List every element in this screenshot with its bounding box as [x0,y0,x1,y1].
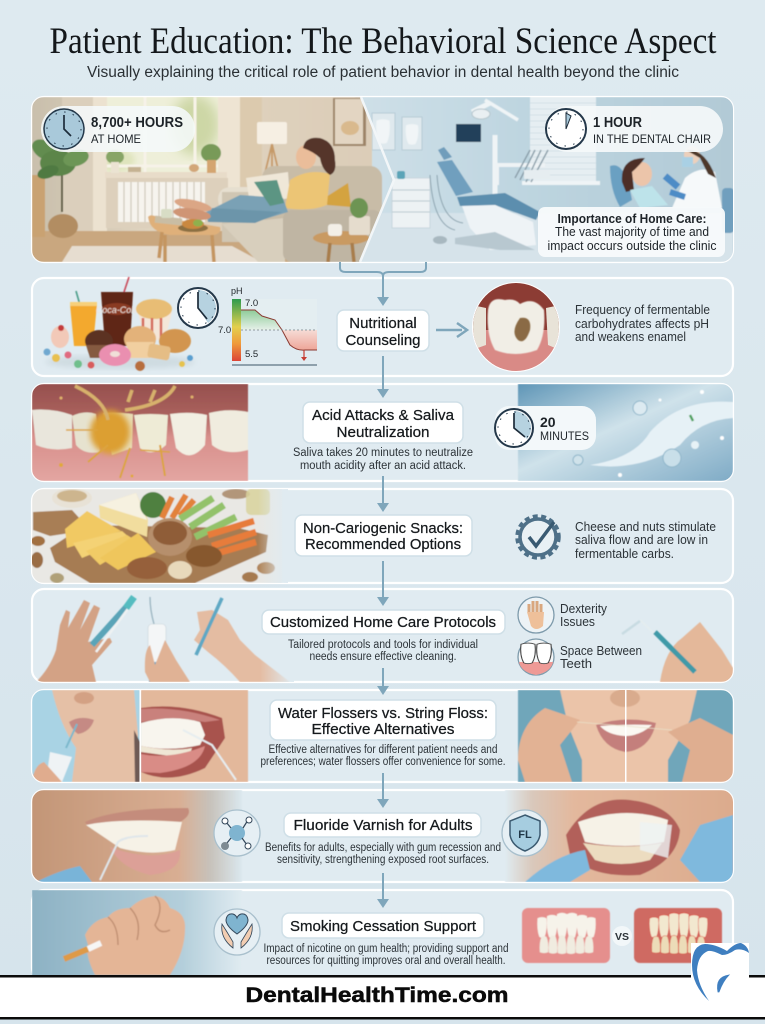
chart: pH curve: 7.0 [218,325,231,336]
description: Saliva takes 20 minutes to neutralize [293,447,473,459]
label: vs: VS [615,931,629,943]
image: water [518,384,733,481]
description: sensitivity, strengthening exposed root surfaces. [277,854,489,866]
heading box: Neutralization [336,424,430,441]
scene: dental room [355,97,735,262]
scene: living room [28,95,382,262]
labels: patient needs: Teeth [560,657,592,671]
sofa [218,186,248,205]
panel: customized home care [32,589,733,685]
description: resources for quitting improves oral and overall health. [266,955,506,967]
badge: hour in the chair: 1 HOUR [593,115,642,131]
footer band [0,975,765,1020]
description: Benefits for adults, especially with gum recession and [265,842,501,854]
label: vs [612,926,632,946]
description: mouth acidity after an acid attack. [300,460,466,472]
chart: pH curve: 7.0 [245,298,258,309]
description [265,842,501,866]
panel: home versus clinic [28,95,735,262]
woman [285,172,330,209]
icon: space between teeth [518,639,554,675]
description [575,303,710,344]
heading box: Nutritional [349,315,417,332]
description: fermentable carbs. [575,547,674,561]
description: and weakens enamel [575,330,686,344]
image: water flosser [32,690,140,782]
panel: nutritional counseling [32,277,733,376]
image: string floss [518,689,733,782]
chart: pH curve: pH [231,286,243,296]
subtitle: Visually explaining the critical role of patient behavior in dental health beyond the clinic [87,64,679,81]
heading box [284,813,481,837]
badge: 20 minutes: MINUTES [540,429,589,443]
image: hands with tools [36,597,733,685]
callout: home care: The vast majority of time and [555,225,709,239]
heading box: Non-Cariogenic Snacks: [303,520,463,537]
description: carbohydrates affects pH [575,317,709,331]
side table [313,231,369,245]
description: Frequency of fermentable [575,303,710,317]
heading box [270,700,496,740]
badge: hours at home: 8,700+ HOURS [91,115,183,131]
patient [610,165,632,207]
labels: patient needs [560,602,642,671]
heading box: Fluoride Varnish for Adults [294,817,472,834]
heading box: Recommended Options [305,536,461,553]
panel: water flossers [32,689,733,782]
food illustration [44,277,195,371]
description [264,943,508,967]
description: needs ensure effective cleaning. [310,651,456,663]
panel: acid attacks [32,384,733,481]
footer website: DentalHealthTime.com [246,984,508,1007]
tooth with decay [470,280,562,375]
description: saliva flow and are low in [575,533,708,547]
callout: home care [538,207,725,257]
food illustration: Coca-Cola [96,305,138,315]
image: snack board [31,488,288,583]
lamp [257,122,287,144]
heading box [262,610,505,634]
labels: patient needs: Issues [560,615,595,629]
heading box: Water Flossers vs. String Floss: [278,705,488,722]
description: Impact of nicotine on gum health; providing support and [264,943,508,955]
badge: hours at home [41,106,195,152]
heading box: Effective Alternatives [312,721,454,738]
frame [333,98,366,146]
image: varnish applied [32,790,242,882]
description [260,744,506,768]
description: Cheese and nuts stimulate [575,520,716,534]
icon: dexterity [518,597,554,633]
icon: molecule [214,810,260,856]
image: healthy gums [522,908,610,963]
dentist [672,170,722,208]
icon: FL shield [502,810,548,856]
logo: tooth [691,943,749,1001]
icon: FL shield: FL [518,829,532,841]
heading box: Acid Attacks & Saliva [312,407,455,424]
image: fist with cigarette [32,890,242,980]
heading box [282,913,484,938]
heading box: Customized Home Care Protocols [270,614,496,631]
heading box [295,515,472,556]
coffee table [148,215,220,235]
plant [61,165,63,212]
panel: non-cariogenic snacks [31,488,733,583]
badge: hour in the chair [545,106,723,152]
image: acid on teeth [32,384,248,481]
chart: pH curve [218,286,317,365]
icon: clock [178,288,218,328]
arrow: to tooth [436,323,467,337]
callout: home care: impact occurs outside the clinic [548,239,716,253]
badge: hour in the chair: IN THE DENTAL CHAIR [593,132,711,146]
panel: smoking cessation [32,890,733,980]
description: Effective alternatives for different patient needs and [268,744,498,756]
heading box: Counseling [345,332,421,349]
flow arrows [340,262,426,908]
badge: 20 minutes [495,406,596,450]
icon: heart in hands [214,909,260,955]
callout: home care: Importance of Home Care: [558,212,706,226]
description [575,520,716,561]
badge: 20 minutes: 20 [540,414,556,430]
chart: pH curve: 5.5 [245,349,258,360]
labels: patient needs: Dexterity [560,602,608,616]
heading box [303,402,463,443]
image: teeth with flosser [141,690,248,782]
description: Tailored protocols and tools for individual [288,639,478,651]
image: inflamed gums [634,908,722,963]
image: gloved hands [505,790,735,882]
heading box [337,310,429,351]
panel: fluoride varnish [32,790,735,882]
description [293,447,473,472]
heading box: Smoking Cessation Support [290,918,477,935]
icon: check badge [517,516,559,558]
description: preferences; water flossers offer convenience for some. [260,756,506,768]
sill plants [106,150,124,164]
badge: hours at home: AT HOME [91,132,141,146]
labels: patient needs: Space Between [560,644,642,658]
description [288,639,478,663]
